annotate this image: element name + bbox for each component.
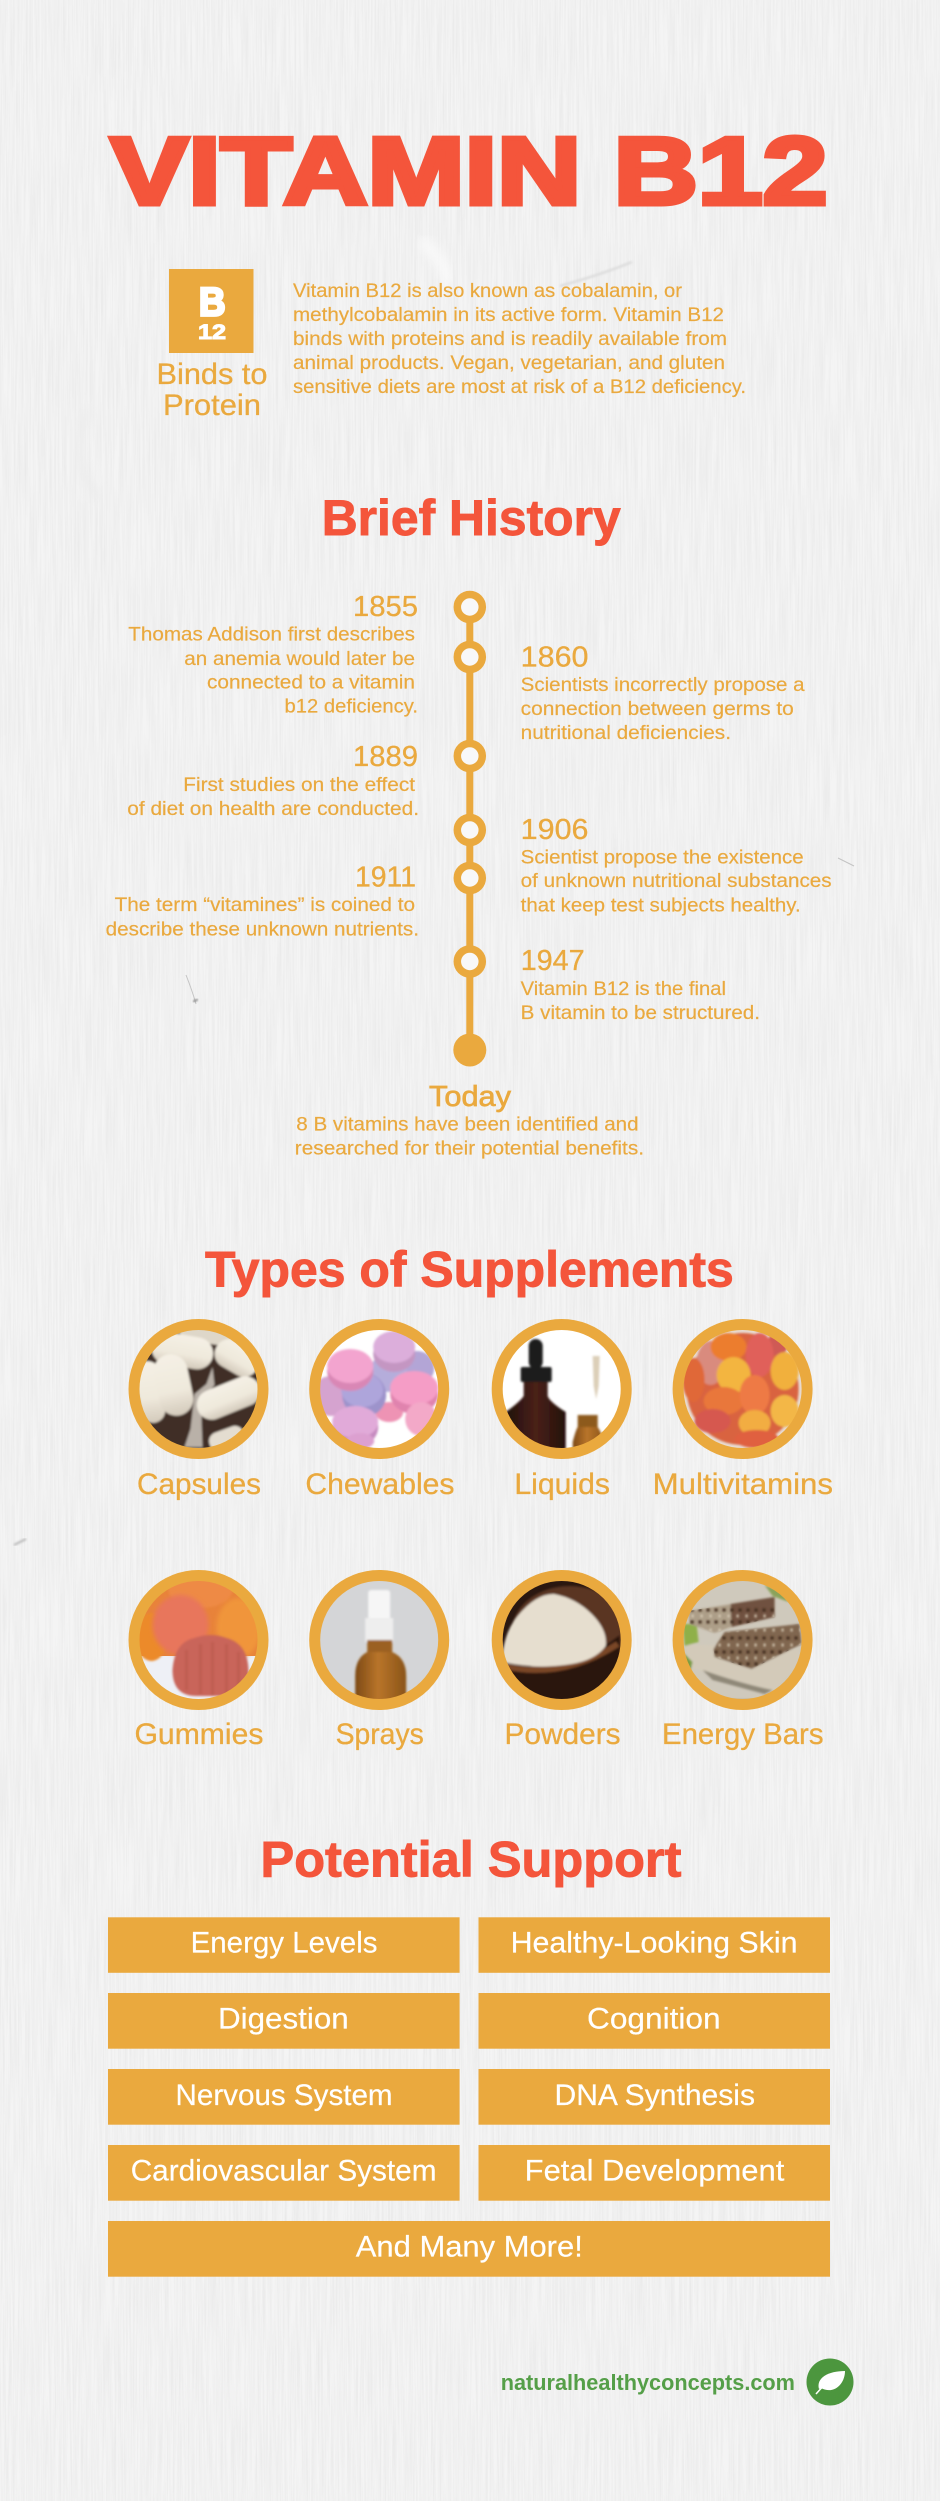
- event 1906: of unknown nutritional substances: [521, 870, 832, 892]
- intro text: methylcobalamin in its active form. Vitamin B12: [293, 304, 724, 326]
- item: chewables: Chewables: [305, 1468, 454, 1501]
- event 1911: describe these unknown nutrients.: [106, 918, 419, 940]
- item: liquids: [497, 1324, 626, 1501]
- item: energy bars: [662, 1576, 824, 1751]
- event 1889: 1889: [353, 741, 418, 773]
- button: dna synthesis: DNA Synthesis: [554, 2079, 755, 2112]
- heading: brief history: Brief History: [322, 490, 621, 546]
- item: gummies: Gummies: [134, 1718, 263, 1751]
- heading: potential support: Potential Support: [260, 1832, 682, 1888]
- event 1906: [521, 814, 832, 916]
- button: cognition: [478, 1993, 830, 2049]
- item: multivitamins: Multivitamins: [653, 1468, 833, 1501]
- event 1860: Scientists incorrectly propose a: [521, 674, 805, 696]
- website url: naturalhealthyconcepts.com: [501, 2370, 795, 2395]
- event today: 8 B vitamins have been identified and: [296, 1114, 639, 1136]
- button: energy levels: Energy Levels: [191, 1927, 378, 1960]
- event 1889: [127, 741, 419, 820]
- event 1906: that keep test subjects healthy.: [521, 894, 801, 916]
- item: chewables: [305, 1324, 454, 1501]
- item: capsules: [134, 1314, 265, 1501]
- button: energy levels: [108, 1917, 460, 1973]
- button: cognition: Cognition: [587, 2002, 721, 2035]
- button: cardiovascular system: [108, 2145, 460, 2201]
- button: fetal development: [478, 2145, 830, 2201]
- panel: supplement types: [134, 1314, 833, 1751]
- item: energy bars: Energy Bars: [662, 1718, 824, 1751]
- item: capsules: Capsules: [137, 1468, 261, 1501]
- button: nervous system: [108, 2069, 460, 2125]
- button: cardiovascular system: Cardiovascular System: [131, 2155, 436, 2188]
- event 1947: [521, 945, 760, 1024]
- event 1947: B vitamin to be structured.: [521, 1002, 760, 1024]
- item: sprays: [315, 1576, 444, 1751]
- button: dna synthesis: [478, 2069, 830, 2125]
- event 1947: Vitamin B12 is the final: [521, 978, 726, 1000]
- icon: leaf logo: [806, 2358, 854, 2406]
- footer: brand: [501, 2358, 854, 2406]
- intro text: [293, 280, 746, 398]
- event 1906: 1906: [521, 814, 588, 846]
- event 1855: connected to a vitamin: [207, 672, 415, 694]
- event 1855: [128, 591, 418, 718]
- event 1860: connection between germs to: [521, 698, 794, 720]
- badge caption: Binds to: [156, 358, 268, 391]
- item: powders: [497, 1576, 628, 1751]
- icon: B12 binds to protein badge: B: [199, 280, 226, 324]
- item: liquids: Liquids: [514, 1468, 610, 1501]
- button: and many more: [108, 2221, 830, 2277]
- button: digestion: Digestion: [218, 2002, 349, 2035]
- event today: [295, 1081, 644, 1159]
- badge caption: [156, 358, 268, 422]
- icon: B12 binds to protein badge: 12: [198, 321, 226, 344]
- item: gummies: [134, 1572, 263, 1751]
- event 1855: b12 deficiency.: [284, 696, 418, 718]
- event 1855: Thomas Addison first describes: [128, 623, 415, 645]
- event 1906: Scientist propose the existence: [521, 846, 804, 868]
- event 1855: an anemia would later be: [184, 648, 415, 670]
- panel: potential support buttons: [108, 1917, 830, 2277]
- badge caption: Protein: [163, 389, 261, 422]
- event today: Today: [429, 1081, 512, 1113]
- intro text: Vitamin B12 is also known as cobalamin, or: [293, 280, 683, 302]
- icon: B12 binds to protein badge: [169, 269, 254, 353]
- panel: intro: [156, 269, 746, 422]
- event 1947: 1947: [521, 945, 585, 977]
- intro text: binds with proteins and is readily available from: [293, 328, 727, 350]
- button: and many more: And Many More!: [356, 2231, 583, 2264]
- button: healthy-looking skin: [478, 1917, 830, 1973]
- item: powders: Powders: [504, 1718, 621, 1751]
- event 1889: First studies on the effect: [183, 774, 416, 796]
- button: nervous system: Nervous System: [176, 2079, 393, 2112]
- event 1860: [521, 641, 805, 744]
- event 1860: nutritional deficiencies.: [521, 722, 731, 744]
- heading: types of supplements: Types of Supplements: [205, 1242, 734, 1298]
- event 1911: [106, 862, 419, 940]
- event 1911: 1911: [355, 862, 416, 894]
- event today: researched for their potential benefits.: [295, 1137, 644, 1159]
- button: healthy-looking skin: Healthy-Looking Skin: [511, 1927, 798, 1960]
- event 1911: The term “vitamines” is coined to: [115, 894, 415, 916]
- button: digestion: [108, 1993, 460, 2049]
- button: fetal development: Fetal Development: [525, 2155, 785, 2188]
- item: multivitamins: [653, 1324, 833, 1501]
- event 1860: 1860: [521, 641, 588, 673]
- title: VITAMIN B12: [110, 118, 827, 225]
- intro text: sensitive diets are most at risk of a B12 deficiency.: [293, 376, 746, 398]
- event 1855: 1855: [353, 591, 418, 623]
- item: sprays: Sprays: [336, 1718, 424, 1751]
- intro text: animal products. Vegan, vegetarian, and gluten: [293, 352, 725, 374]
- event 1889: of diet on health are conducted.: [127, 798, 419, 820]
- panel: timeline: [106, 591, 832, 1159]
- timeline spine and markers: [453, 594, 486, 1066]
